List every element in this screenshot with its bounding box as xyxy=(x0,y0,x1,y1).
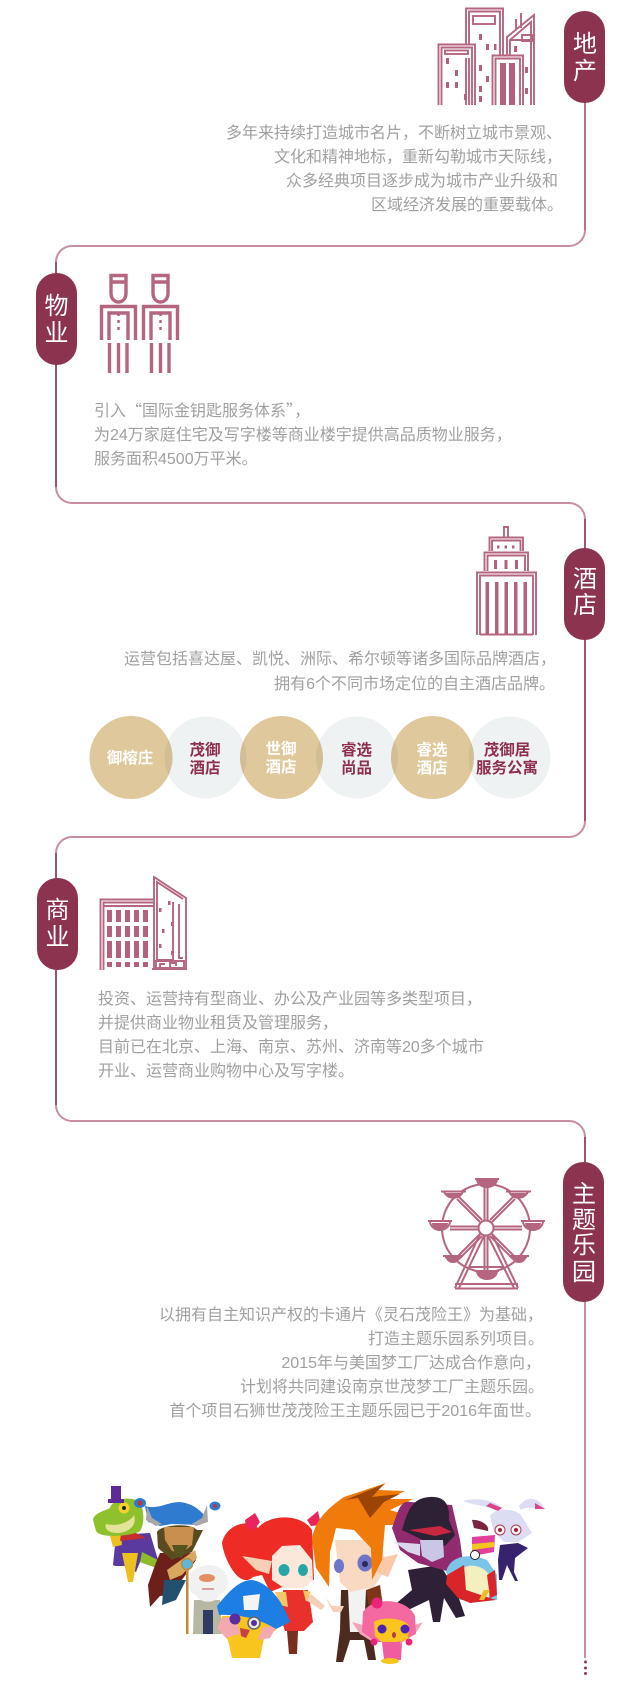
pill label: 地产: 地 xyxy=(573,31,597,58)
text block: 主题乐园: 计划将共同建设南京世茂梦工厂主题乐园。 xyxy=(240,1378,544,1396)
brand: 睿选尚品: 尚品 xyxy=(341,759,372,777)
text block: 物业: 引入“国际金钥匙服务体系”， xyxy=(94,397,310,421)
text block: 主题乐园 xyxy=(159,1306,544,1420)
pill label: 酒店: 店 xyxy=(573,592,597,619)
icon: commercial buildings xyxy=(100,877,186,970)
icon: hotel tower xyxy=(477,527,536,635)
text block: 主题乐园: 2015年与美国梦工厂达成合作意向， xyxy=(281,1353,541,1372)
brand: 茂御酒店: 茂御 xyxy=(189,741,221,759)
panel: 酒店 xyxy=(90,527,605,799)
character: white-bearded elder xyxy=(182,1558,228,1634)
brand: 茂御酒店 xyxy=(189,741,221,777)
text block: 商业: 目前已在北京、上海、南京、苏州、济南等20多个城市 xyxy=(98,1038,484,1056)
text block: 商业: 投资、运营持有型商业、办公及产业园等多类型项目， xyxy=(98,990,482,1008)
text block: 酒店: 拥有6个不同市场定位的自主酒店品牌。 xyxy=(274,675,555,693)
character: pink cat xyxy=(352,1598,423,1664)
brand: 世御酒店: 酒店 xyxy=(265,758,297,776)
brand: 睿选酒店: 睿选 xyxy=(416,741,448,759)
character: red-haired girl xyxy=(222,1511,325,1654)
pill label: 主题乐园: 园 xyxy=(572,1259,596,1286)
icon: two concierges xyxy=(102,276,178,373)
brand: 睿选酒店: 酒店 xyxy=(416,759,448,777)
timeline end dots xyxy=(584,1660,587,1675)
brand: 茂御居服务公寓: 服务公寓 xyxy=(476,758,538,777)
pill label: 物业: 业 xyxy=(44,320,68,347)
pill label: 物业 xyxy=(36,273,77,365)
text block: 地产: 多年来持续打造城市名片，不断树立城市景观、 xyxy=(226,124,562,142)
pill label: 主题乐园: 题 xyxy=(572,1207,596,1234)
pill label: 地产: 产 xyxy=(573,58,597,85)
text block: 物业: 服务面积4500万平米。 xyxy=(94,450,258,468)
pill label: 主题乐园: 乐 xyxy=(572,1232,596,1259)
text block: 地产: 文化和精神地标，重新勾勒城市天际线， xyxy=(274,148,562,166)
character: blue fish in red coat xyxy=(446,1520,497,1603)
brand: 御榕庄: 御榕庄 xyxy=(107,748,153,767)
panel: 主题乐园 xyxy=(159,1162,604,1420)
text block: 主题乐园: 打造主题乐园系列项目。 xyxy=(368,1330,544,1348)
character: horned warrior xyxy=(134,1498,220,1607)
text block: 商业 xyxy=(98,990,484,1080)
illustration: cartoon characters xyxy=(93,1483,545,1664)
brand: 睿选尚品 xyxy=(341,741,372,777)
brand: 茂御酒店: 酒店 xyxy=(189,759,221,777)
pill label: 酒店 xyxy=(564,548,605,640)
panel: 物业 xyxy=(36,273,512,468)
character: crocodile xyxy=(93,1486,158,1582)
pill label: 物业: 物 xyxy=(44,293,68,320)
character: pirate hat cat xyxy=(217,1580,290,1658)
pill label: 商业 xyxy=(37,878,78,970)
text block: 主题乐园: 以拥有自主知识产权的卡通片《灵石茂险王》为基础， xyxy=(159,1306,543,1324)
panel: 地产 xyxy=(226,8,605,214)
panel: 商业 xyxy=(37,877,484,1080)
icon: city buildings xyxy=(438,8,534,105)
character: white rabbit xyxy=(463,1499,545,1581)
pill label: 主题乐园 xyxy=(563,1162,604,1302)
text block: 主题乐园: 首个项目石狮世茂茂险王主题乐园已于2016年面世。 xyxy=(169,1402,541,1420)
text block: 地产 xyxy=(226,124,563,214)
text block: 物业 xyxy=(94,397,512,468)
character: dark vampire xyxy=(392,1497,465,1622)
brand: 睿选尚品: 睿选 xyxy=(341,741,372,759)
brand: 睿选酒店 xyxy=(416,741,448,777)
brand: 茂御居服务公寓 xyxy=(476,741,538,777)
text block: 商业: 开业、运营商业购物中心及写字楼。 xyxy=(98,1062,354,1080)
text block: 物业: 为24万家庭住宅及写字楼等商业楼宇提供高品质物业服务， xyxy=(94,426,512,444)
text block: 酒店 xyxy=(124,650,556,693)
text block: 商业: 并提供商业物业租赁及管理服务， xyxy=(98,1014,338,1032)
pill label: 商业: 业 xyxy=(46,924,70,951)
icon: ferris wheel xyxy=(428,1179,545,1288)
brand: 世御酒店 xyxy=(265,740,297,776)
text block: 地产: 众多经典项目逐步成为城市产业升级和 xyxy=(286,172,558,190)
brand: 世御酒店: 世御 xyxy=(265,740,297,758)
pill label: 酒店: 酒 xyxy=(573,566,597,593)
brand: 茂御居服务公寓: 茂御居 xyxy=(484,741,530,759)
text block: 地产: 区域经济发展的重要载体。 xyxy=(371,196,563,214)
text block: 酒店: 运营包括喜达屋、凯悦、洲际、希尔顿等诸多国际品牌酒店， xyxy=(124,650,556,668)
pill label: 商业: 商 xyxy=(46,897,70,924)
pill label: 主题乐园: 主 xyxy=(572,1181,596,1208)
pill label: 地产 xyxy=(564,11,605,103)
brand circles xyxy=(90,716,550,799)
timeline connector xyxy=(56,100,585,1658)
character: orange-haired hero xyxy=(312,1483,413,1662)
